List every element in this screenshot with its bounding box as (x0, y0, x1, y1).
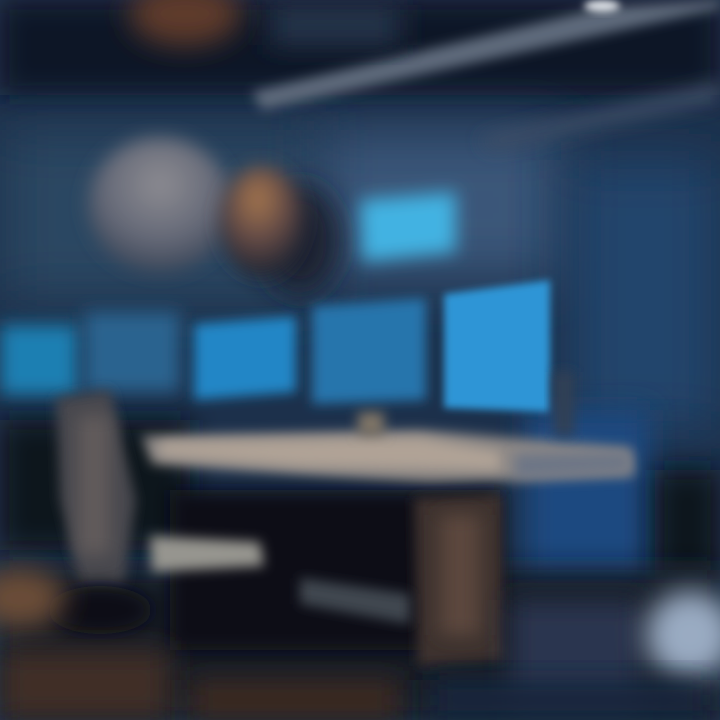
monitor far left (0, 325, 78, 395)
shadow behind spheres (260, 185, 340, 295)
desk items (358, 412, 384, 436)
upper wall screen (360, 192, 456, 262)
floor (0, 568, 720, 720)
desk shadow underside (170, 490, 500, 650)
desk (142, 372, 634, 666)
desk top (142, 430, 634, 484)
ceiling lamp: copper top (129, 0, 241, 46)
monitor centre left (194, 316, 296, 400)
monitors row (0, 280, 550, 412)
monitor left (84, 312, 180, 392)
ceiling beams (252, 0, 720, 150)
monitor right (444, 280, 550, 412)
pendant lamp: grey sphere (88, 137, 232, 273)
pendant lamp: copper sphere (220, 166, 304, 278)
desk shelf (300, 578, 410, 624)
monitor centre (312, 298, 426, 404)
desk leg (414, 494, 504, 666)
chair (48, 390, 264, 634)
